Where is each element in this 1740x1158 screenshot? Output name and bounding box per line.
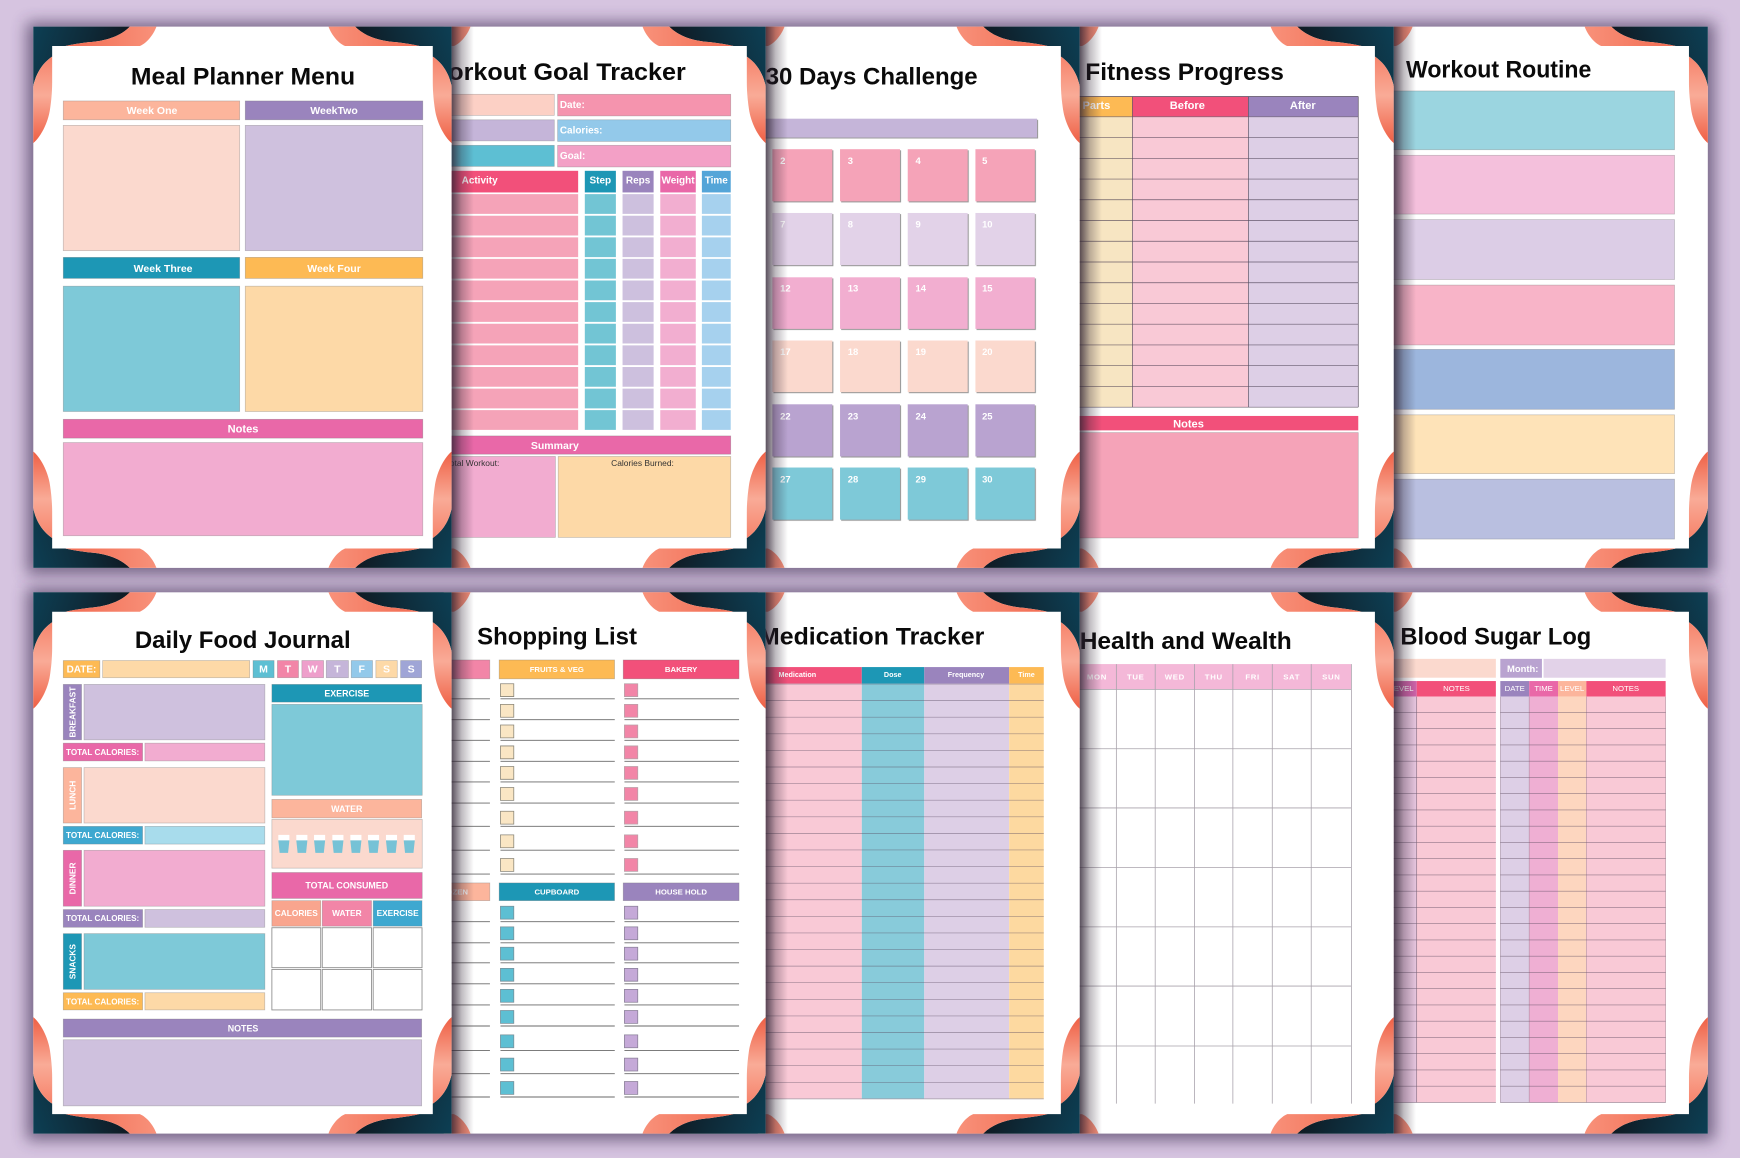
week four: Week Four: [307, 263, 361, 275]
log table right: NOTES: [1612, 684, 1639, 693]
challenge day grid: 18: [848, 346, 858, 357]
challenge day grid: 8: [848, 218, 853, 229]
table: body parts before and after: Parts: [1083, 100, 1110, 112]
panel: shopping list: [347, 592, 766, 1134]
challenge day grid: 2: [780, 155, 785, 166]
weekday boxes: W: [308, 664, 318, 676]
list section headers: BAKERY: [665, 665, 698, 674]
panel: meal planner menu: [33, 27, 452, 568]
checkboxes: fruits and veg: [500, 684, 514, 871]
summary boxes: Calories Burned:: [611, 458, 674, 468]
weekday boxes: M: [259, 664, 268, 676]
info fields: [377, 94, 731, 167]
table: body parts before and after: [1019, 96, 1358, 408]
title: medication tracker: Medication Tracker: [759, 623, 985, 650]
notes box: [1019, 433, 1358, 538]
calendar header: [1077, 664, 1351, 689]
challenge day grid: 17: [780, 346, 791, 357]
summary bar: Summary: [531, 440, 579, 452]
challenge day grid: 4: [915, 155, 921, 166]
lunch: TOTAL CALORIES:: [66, 830, 139, 840]
log table right: TIME: [1534, 684, 1553, 693]
challenge day grid: 25: [982, 410, 993, 421]
challenge day grid: 12: [780, 283, 791, 294]
medication table: Time: [1018, 670, 1035, 679]
total consumed: [272, 872, 422, 1010]
snacks: TOTAL CALORIES:: [66, 996, 139, 1006]
water tracker: [272, 799, 422, 868]
challenge day grid: 27: [780, 474, 791, 484]
panel: health and wealth: [975, 592, 1394, 1134]
activity table header: Reps: [626, 176, 651, 187]
notes: [63, 1019, 422, 1106]
shadow: top row: [27, 22, 1714, 575]
week two: [245, 101, 423, 251]
medication table: Medication: [778, 670, 816, 679]
total consumed: EXERCISE: [377, 908, 419, 918]
list section headers: CUPBOARD: [534, 888, 580, 897]
week two: WeekTwo: [310, 105, 358, 117]
title: workout goal tracker: Workout Goal Tracker: [425, 59, 686, 86]
title: daily food journal: Daily Food Journal: [135, 627, 351, 654]
challenge day grid: 7: [780, 218, 785, 229]
list section headers: FRIDGE & FROZEN: [397, 888, 468, 897]
name and month fields: Month:: [1507, 663, 1538, 674]
calendar header: SAT: [1283, 672, 1300, 681]
weekday boxes: S: [408, 664, 415, 676]
table: body parts before and after: Before: [1170, 100, 1205, 112]
weekday boxes: T: [285, 664, 292, 676]
challenge day grid: 15: [982, 283, 993, 294]
breakfast: [63, 684, 265, 761]
panel: fitness progress: [975, 27, 1394, 568]
calendar header: MON: [1087, 672, 1107, 681]
dinner: DINNER: [67, 863, 77, 894]
summary boxes: [377, 456, 731, 537]
log table right: [1500, 681, 1666, 1104]
challenge day grid: 29: [915, 474, 926, 484]
medication table: Frequency: [948, 670, 984, 679]
title: blood sugar log: Blood Sugar Log: [1400, 623, 1591, 650]
activity table rows: [478, 194, 716, 430]
week three: Week Three: [134, 263, 193, 275]
panel: workout goal tracker: [347, 27, 766, 568]
dinner: TOTAL CALORIES:: [66, 913, 139, 923]
challenge day grid: 24: [915, 410, 927, 421]
table: body parts before and after: After: [1290, 100, 1316, 112]
log table left: LEVEL: [1389, 684, 1414, 693]
summary boxes: Total Workout:: [446, 458, 499, 468]
weekday boxes: S: [383, 664, 390, 676]
total consumed: WATER: [332, 908, 362, 918]
summary bar: [377, 436, 731, 454]
challenge day grid: 5: [982, 155, 987, 166]
challenge day grid: 14: [915, 283, 927, 294]
date field: DATE:: [67, 665, 96, 676]
weekday boxes: T: [334, 664, 341, 676]
calendar header: FRI: [1245, 672, 1260, 681]
list section headers: HOUSE HOLD: [655, 888, 707, 897]
challenge day grid: 10: [982, 218, 993, 229]
name and month fields: [1321, 659, 1666, 678]
notes: NOTES: [228, 1024, 258, 1034]
challenge day grid: 3: [848, 155, 853, 166]
notes: [63, 419, 423, 536]
checkboxes: cupboard: [500, 906, 514, 1094]
week four: [245, 257, 423, 412]
log table left: [1321, 681, 1496, 1104]
lunch: [63, 768, 265, 844]
exercise: EXERCISE: [324, 689, 369, 699]
challenge day grid: 19: [915, 346, 926, 357]
calendar header: WED: [1165, 672, 1185, 681]
list section headers: [375, 660, 739, 901]
activity table header: Weight: [661, 176, 695, 187]
checkboxes: bakery: [624, 684, 638, 871]
week one: [63, 101, 240, 251]
log table right: LEVEL: [1560, 684, 1585, 693]
panel: 30 days challenge: [661, 27, 1080, 568]
notes bar: [1019, 416, 1358, 431]
calendar header: TUE: [1127, 672, 1145, 681]
title: workout routine: Workout Routine: [1406, 57, 1591, 84]
weekday boxes: F: [359, 664, 366, 676]
breakfast: BREAKFAST: [67, 687, 77, 738]
exercise: [272, 684, 422, 795]
week one: Week One: [127, 105, 178, 117]
page edge shadows: [452, 27, 1416, 1134]
activity table header: Time: [705, 176, 728, 187]
challenge day grid: 22: [780, 410, 791, 421]
title: 30 days challenge: 30 Days Challenge: [766, 63, 978, 90]
challenge day grid: 23: [848, 410, 858, 421]
snacks: SNACKS: [67, 944, 77, 979]
calendar grid: [1076, 664, 1351, 1104]
info fields: Date:: [560, 100, 585, 111]
title: fitness progress: Fitness Progress: [1085, 59, 1284, 86]
title: health and wealth: Health and Wealth: [1080, 628, 1292, 655]
list section headers: FRUITS & VEG: [530, 665, 584, 674]
challenge day grid: 9: [915, 218, 921, 229]
log table left: NOTES: [1443, 684, 1470, 693]
checkboxes: house hold: [624, 906, 638, 1094]
panel: workout routine: [1289, 27, 1708, 568]
date field: [63, 661, 250, 678]
medication table: Dose: [884, 670, 902, 679]
snacks: [63, 934, 265, 1010]
notes bar: Notes: [1173, 419, 1204, 431]
routine bars: [1332, 91, 1675, 539]
activity table header: [377, 171, 731, 192]
title: meal planner menu: Meal Planner Menu: [131, 63, 355, 90]
challenge day grid: 13: [848, 283, 858, 294]
shadow: bottom row: [27, 588, 1714, 1140]
panel: daily food journal: [33, 592, 452, 1134]
panel: blood sugar log: [1289, 592, 1708, 1134]
breakfast: TOTAL CALORIES:: [66, 747, 139, 757]
log table right: DATE: [1505, 684, 1525, 693]
challenge day grid: 30: [982, 474, 993, 484]
weekday boxes: [253, 661, 422, 678]
dinner: [63, 850, 265, 927]
month bar: [706, 119, 1037, 138]
activity table header: Step: [590, 176, 611, 187]
calendar header: SUN: [1322, 672, 1340, 681]
info fields: Calories:: [560, 126, 603, 137]
list rule lines: [377, 699, 739, 1097]
total consumed: TOTAL CONSUMED: [305, 880, 389, 890]
challenge day grid: 20: [982, 346, 993, 357]
activity table header: Activity: [462, 176, 498, 187]
water tracker: WATER: [331, 804, 363, 814]
challenge day grid: 28: [848, 474, 858, 484]
calendar header: THU: [1205, 672, 1223, 681]
medication table: [701, 667, 1044, 1099]
challenge day grid: [772, 149, 1035, 520]
title: shopping list: Shopping List: [477, 623, 637, 650]
notes: Notes: [228, 424, 258, 436]
total consumed: CALORIES: [275, 908, 318, 918]
panel: medication tracker: [661, 592, 1080, 1134]
lunch: LUNCH: [67, 781, 77, 810]
info fields: Goal:: [560, 151, 585, 162]
week three: [63, 257, 240, 412]
